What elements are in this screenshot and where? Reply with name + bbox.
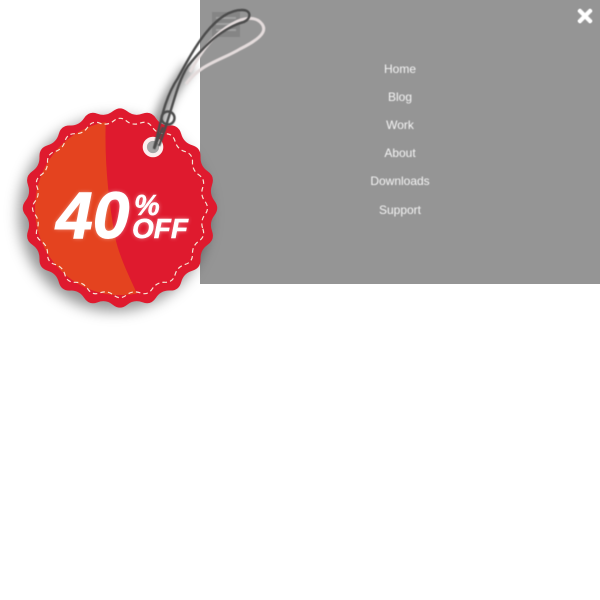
icon: close X xyxy=(578,10,592,22)
tag shadow xyxy=(19,117,209,311)
navigation menu xyxy=(370,62,430,217)
icon: hamburger menu xyxy=(212,12,240,37)
menu item: Blog: Blog xyxy=(388,90,412,104)
panel: grey menu overlay xyxy=(200,0,600,284)
menu item: Work: Work xyxy=(386,118,414,132)
figure: 40: 40 xyxy=(54,178,130,252)
word: OFF: OFF xyxy=(132,213,189,244)
menu item: Support: Support xyxy=(379,203,421,217)
orange left shade xyxy=(35,122,137,296)
string shadow xyxy=(152,66,190,146)
tag string: light loop xyxy=(186,18,264,84)
menu item: Downloads: Downloads xyxy=(370,174,430,188)
menu item: Home: Home xyxy=(384,62,416,76)
tag eyelet hole xyxy=(145,139,161,155)
text glow: 40 xyxy=(54,178,130,252)
text glow: % xyxy=(134,190,160,222)
percent sign: % xyxy=(134,190,160,222)
menu item: About: About xyxy=(384,146,416,160)
text glow: OFF xyxy=(132,213,189,244)
stitched dashed outline xyxy=(21,107,219,309)
discount text: 40% OFF xyxy=(54,178,189,252)
discount tag badge xyxy=(22,108,218,308)
tag scalloped red body xyxy=(10,95,230,321)
tag string: dark loop and knot xyxy=(154,10,249,149)
text glow xyxy=(54,178,189,252)
